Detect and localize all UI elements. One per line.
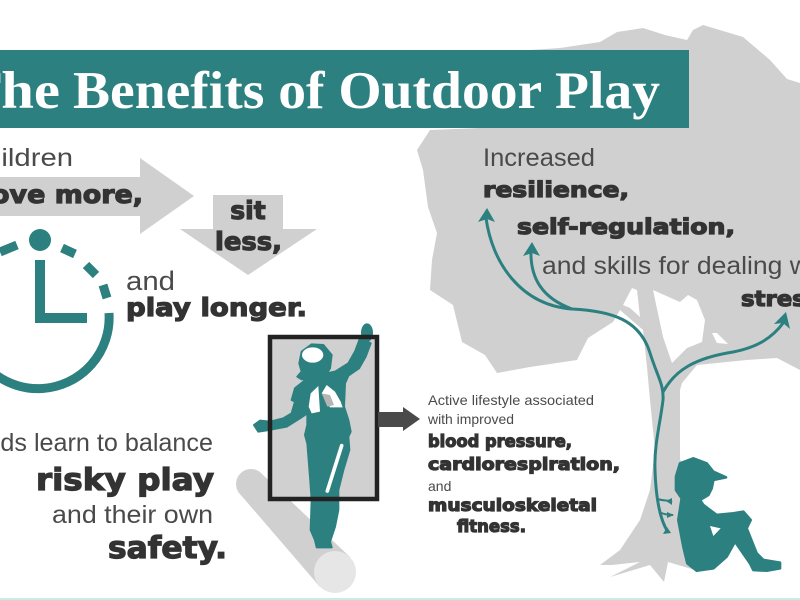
text: risky play: risky play	[36, 463, 214, 498]
text: increased: Increased	[483, 144, 595, 172]
text: resilience: resilience,	[483, 178, 629, 202]
arrow: to lifestyle	[378, 407, 420, 431]
text: and their own: and their own	[52, 501, 213, 529]
text: active lifestyle: and	[428, 478, 451, 494]
tree silhouette	[417, 25, 800, 582]
label: less: less,	[215, 227, 282, 256]
bone	[327, 446, 342, 491]
gap between arm and leg	[710, 526, 721, 536]
boy sitting under tree	[675, 458, 780, 571]
arrows: benefits flowing from child to tree	[478, 208, 790, 534]
x-ray box background	[269, 336, 378, 500]
text: active lifestyle: fitness.	[457, 517, 526, 537]
bottom rule	[0, 598, 800, 600]
text: active lifestyle: with improved	[427, 411, 514, 427]
child on log	[254, 323, 373, 547]
text: play longer: play longer.	[126, 293, 307, 322]
log	[236, 469, 356, 593]
text: active lifestyle: blood pressure,	[428, 432, 572, 452]
heart	[322, 393, 334, 407]
text: and: and	[126, 266, 175, 296]
text: active lifestyle	[427, 392, 620, 537]
brain	[302, 347, 323, 363]
title text: Benefits of Outdoor Play	[73, 62, 660, 120]
text: safety: safety.	[108, 531, 227, 566]
text: kids learn to balance	[0, 429, 227, 566]
text: self-regulation: self-regulation,	[517, 215, 735, 239]
lungs	[309, 385, 343, 413]
x-ray box frame	[270, 337, 377, 499]
hand	[361, 323, 373, 342]
arrow: move more	[0, 158, 194, 234]
text: active lifestyle: Active lifestyle associated	[428, 392, 594, 408]
canopy gaps	[623, 288, 728, 363]
title banner	[0, 50, 689, 128]
text: active lifestyle: cardiorespiration,	[428, 455, 620, 475]
boy head	[675, 459, 713, 496]
icon: clock	[0, 229, 109, 389]
arrow: sit less	[180, 195, 317, 275]
text: active lifestyle: musculoskeletal	[428, 496, 597, 516]
label: sit less: sit	[230, 196, 266, 225]
